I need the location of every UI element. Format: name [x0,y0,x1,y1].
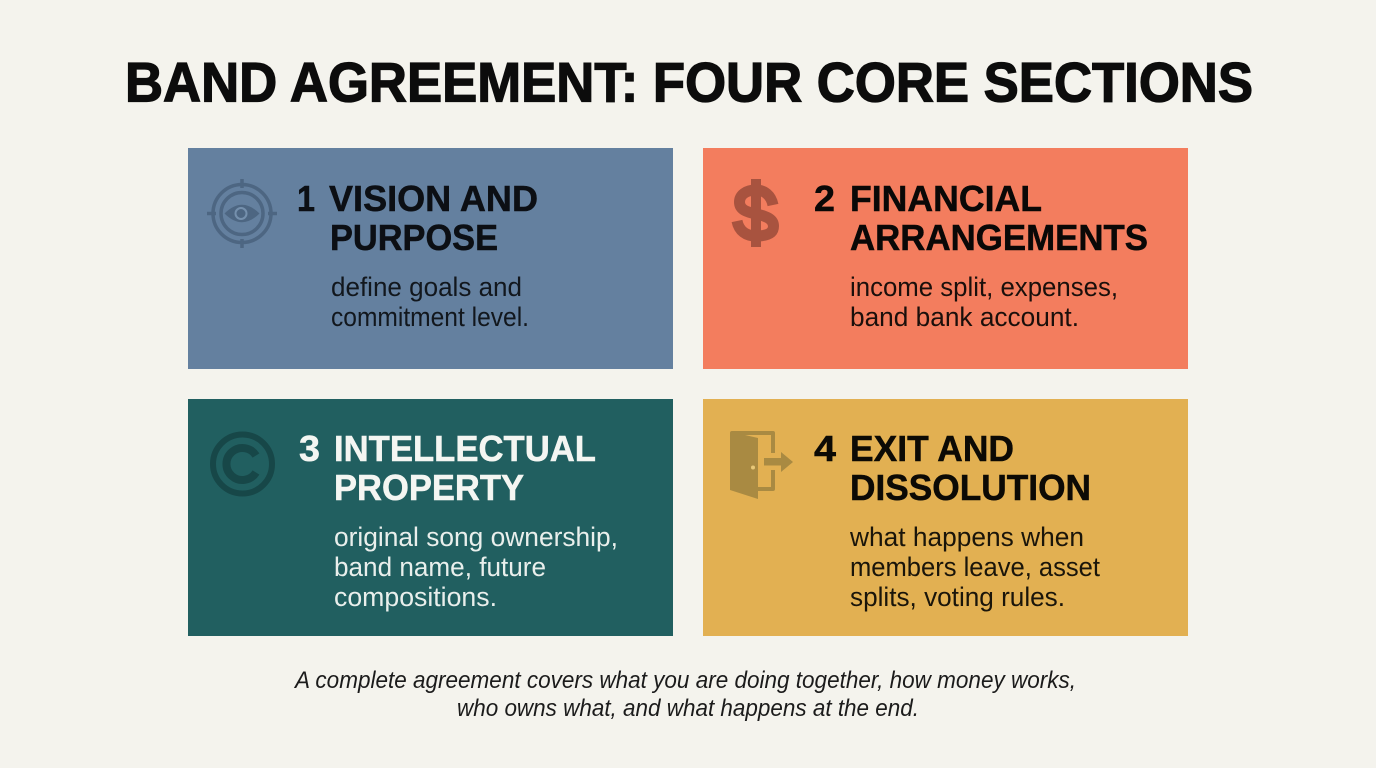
number and heading [297,178,538,258]
number and heading: 1 [297,178,315,219]
panel: intellectual property [188,399,673,636]
footer note: A complete agreement covers what you are doing together, how money works, [293,667,1076,694]
panel: exit and dissolution [703,399,1188,636]
description: original song ownership, [334,522,618,552]
number and heading: FINANCIAL [850,178,1042,219]
number and heading [299,428,596,508]
description: define goals and [331,272,522,302]
description: income split, expenses, [850,272,1118,302]
number and heading [814,428,1091,508]
description: splits, voting rules. [850,582,1065,612]
panel: vision and purpose [188,148,673,369]
number and heading: 4 [814,428,837,469]
title: BAND AGREEMENT: FOUR CORE SECTIONS [125,50,1253,114]
number and heading: EXIT AND [850,428,1014,469]
icon: copyright symbol [213,434,272,494]
number and heading: DISSOLUTION [850,467,1091,508]
description: compositions. [334,582,497,612]
icon: target with eye [207,179,277,248]
panel: financial arrangements [703,148,1188,369]
description: band bank account. [850,302,1079,332]
number and heading [814,178,1148,258]
description [334,522,618,612]
number and heading: PURPOSE [330,217,498,258]
description: members leave, asset [850,552,1100,582]
description: band name, future [334,552,546,582]
footer note: who owns what, and what happens at the end. [457,695,919,722]
description [849,522,1100,612]
icon: dollar sign [737,179,774,247]
number and heading: ARRANGEMENTS [850,217,1148,258]
description: commitment level. [331,302,529,332]
description [331,272,529,332]
number and heading: INTELLECTUAL [334,428,596,469]
description: what happens when [849,522,1084,552]
description [850,272,1118,332]
number and heading: PROPERTY [334,467,524,508]
icon: door with arrow [730,431,793,499]
number and heading: 2 [814,178,835,219]
number and heading: VISION AND [329,178,538,219]
footer note [293,667,1076,722]
number and heading: 3 [299,428,320,469]
